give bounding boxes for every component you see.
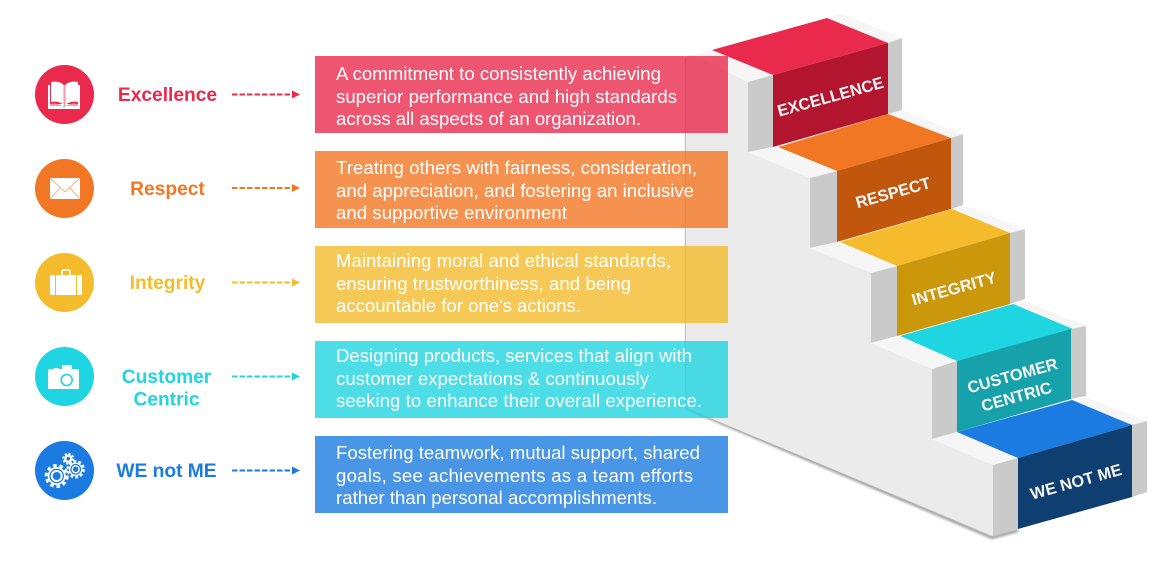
staircase left edge: [684, 58, 686, 408]
arrow: WE not ME: [232, 466, 300, 474]
staircase: 3D steps: [686, 13, 1147, 538]
step: Excellence: EXCELLENCE: [776, 74, 886, 120]
arrow: Excellence: [232, 90, 300, 98]
step: We not Me: [932, 397, 1147, 536]
panel: Customer Centric description: Designing products, services that align with: [336, 345, 692, 366]
step: Integrity: INTEGRITY: [910, 269, 999, 309]
step: Customer Centric: CENTRIC: [979, 379, 1054, 416]
step: Respect: RESPECT: [854, 174, 933, 212]
label: Customer Centric: [122, 367, 212, 410]
arrow: Integrity: [232, 278, 300, 286]
label: WE not ME: WE not ME: [116, 461, 217, 482]
icon: camera: [35, 347, 94, 406]
panel: Excellence description: A commitment to consistently achieving: [336, 63, 661, 84]
staircase body: [686, 55, 993, 536]
step: Integrity: [810, 205, 1025, 343]
staircase shadow: [686, 408, 1018, 538]
panel: Integrity description: [315, 246, 728, 323]
arrow: Customer Centric: [232, 372, 300, 380]
panel: Excellence description: across all aspects of an organization.: [336, 108, 641, 129]
step: Excellence: [693, 13, 902, 152]
panel: Respect description: Treating others with fairness, consideration,: [336, 157, 697, 178]
step: We not Me: WE NOT ME: [1028, 461, 1124, 503]
step: Customer Centric: CUSTOMER: [966, 355, 1060, 397]
label: Customer Centric: Customer: [122, 367, 212, 388]
step: Respect: [748, 110, 963, 248]
label: Customer Centric: Centric: [133, 390, 200, 410]
panel: Customer Centric description: seeking to enhance their overall experience.: [336, 390, 702, 411]
panel: Excellence description: [315, 56, 728, 133]
label: Excellence: Excellence: [118, 85, 217, 106]
panel: Respect description: and appreciation, and fostering an inclusive: [336, 180, 694, 201]
panel: We not Me description: [315, 436, 728, 513]
panel: Customer Centric description: [315, 341, 728, 418]
panel: Integrity description: accountable for one's actions.: [336, 295, 581, 316]
step: Customer Centric: [871, 301, 1086, 439]
panel: We not Me description: rather than personal accomplishments.: [336, 487, 657, 508]
label: Integrity: Integrity: [130, 273, 206, 294]
icon: gears: [35, 441, 94, 500]
panel: Excellence description: superior performance and high standards: [336, 86, 677, 107]
arrow: Respect: [232, 184, 300, 192]
panel: Integrity description: ensuring trustworthiness, and being: [336, 273, 631, 294]
panel: Respect description: and supportive environment: [336, 202, 568, 223]
icon: briefcase: [35, 253, 94, 312]
panel: Integrity description: Maintaining moral and ethical standards,: [336, 250, 671, 271]
panel: Respect description: [315, 151, 728, 228]
icon: book: [35, 65, 94, 124]
label: Respect: Respect: [130, 179, 205, 200]
panel: We not Me description: goals, see achievements as a team efforts: [336, 465, 693, 486]
panel: Customer Centric description: customer expectations & continuously: [336, 368, 650, 389]
icon: envelope: [35, 159, 94, 218]
panel: We not Me description: Fostering teamwork, mutual support, shared: [336, 442, 700, 463]
